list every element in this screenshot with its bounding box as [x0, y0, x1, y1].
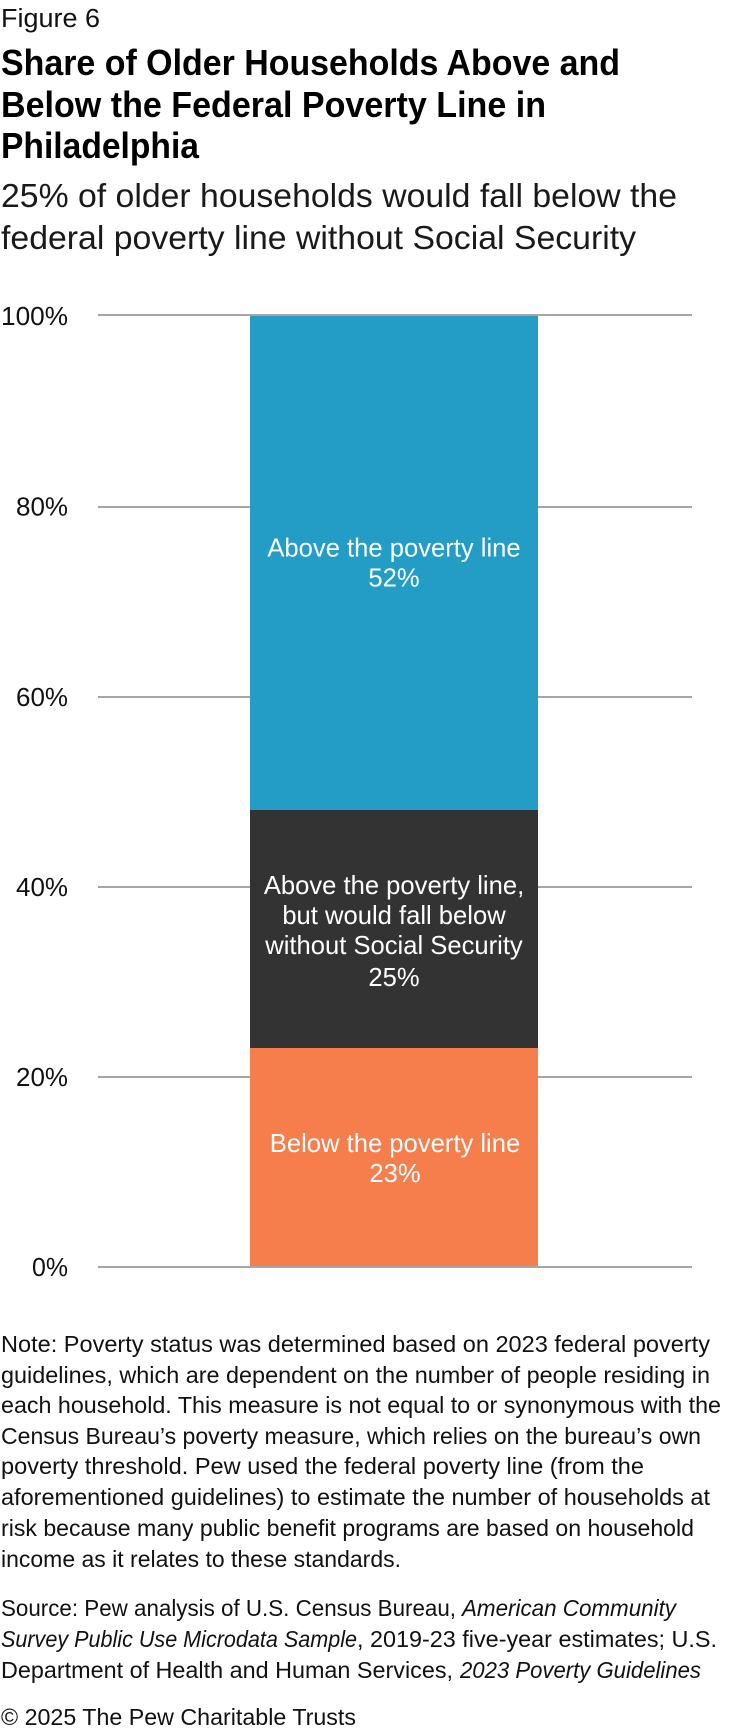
y-axis labels: 60%	[16, 682, 68, 712]
source text: , 2019-23 five-year estimates; U.S.	[357, 1626, 717, 1652]
title: Philadelphia	[1, 125, 200, 166]
y-axis labels	[1, 301, 68, 1282]
bar segment: above but would fall below without Social Security 25%	[250, 810, 538, 1048]
title	[1, 42, 620, 166]
note text	[1, 1331, 721, 1572]
y-axis labels: 20%	[16, 1062, 68, 1092]
source text: Source: Pew analysis of U.S. Census Bureau,	[1, 1595, 456, 1621]
note text: Note: Poverty status was determined based on 2023 federal poverty	[1, 1331, 710, 1357]
stacked bar chart	[1, 301, 692, 1282]
title: Below the Federal Poverty Line in	[1, 84, 546, 125]
bar segment: below the poverty line 23%	[250, 1048, 538, 1266]
y-axis labels: 100%	[1, 301, 68, 331]
bar segment: above but would fall below without Social Security 25%: without Social Security	[264, 932, 523, 960]
bar segment: above the poverty line 52%: 52%	[368, 564, 420, 592]
note text: poverty threshold. Pew used the federal poverty line (from the	[1, 1453, 644, 1479]
y-axis labels: 80%	[16, 492, 68, 522]
subtitle: federal poverty line without Social Security	[1, 220, 636, 257]
bar segment: above but would fall below without Social Security 25%: Above the poverty line,	[264, 872, 524, 900]
copyright: © 2025 The Pew Charitable Trusts	[1, 1704, 356, 1730]
y-axis labels: 0%	[32, 1252, 68, 1282]
bar segment: above but would fall below without Social Security 25%: but would fall below	[282, 902, 506, 930]
source text	[1, 1595, 717, 1683]
bar segment: below the poverty line 23%: 23%	[369, 1160, 421, 1188]
source text: Survey Public Use Microdata Sample	[1, 1626, 357, 1652]
source text: 2023 Poverty Guidelines	[459, 1657, 701, 1683]
bar segment: above but would fall below without Social Security 25%: 25%	[368, 964, 420, 992]
note text: risk because many public benefit programs are based on household	[1, 1515, 694, 1541]
subtitle: 25% of older households would fall below the	[1, 178, 677, 215]
y-axis labels: 40%	[16, 872, 68, 902]
bar segment: above the poverty line 52%: Above the poverty line	[267, 534, 521, 562]
note text: guidelines, which are dependent on the number of people residing in	[1, 1362, 710, 1388]
bar segment: above the poverty line 52%	[250, 316, 538, 810]
source text: American Community	[460, 1595, 677, 1621]
subtitle	[1, 178, 677, 257]
note text: aforementioned guidelines) to estimate the number of households at	[1, 1484, 711, 1510]
note text: income as it relates to these standards.	[1, 1546, 401, 1572]
bar segment: below the poverty line 23%: Below the poverty line	[270, 1130, 520, 1158]
source text: Department of Health and Human Services,	[1, 1657, 453, 1683]
note text: each household. This measure is not equal to or synonymous with the	[1, 1392, 721, 1418]
figure label: Figure 6	[1, 5, 100, 33]
note text: Census Bureau’s poverty measure, which relies on the bureau’s own	[1, 1423, 701, 1449]
title: Share of Older Households Above and	[1, 42, 620, 83]
